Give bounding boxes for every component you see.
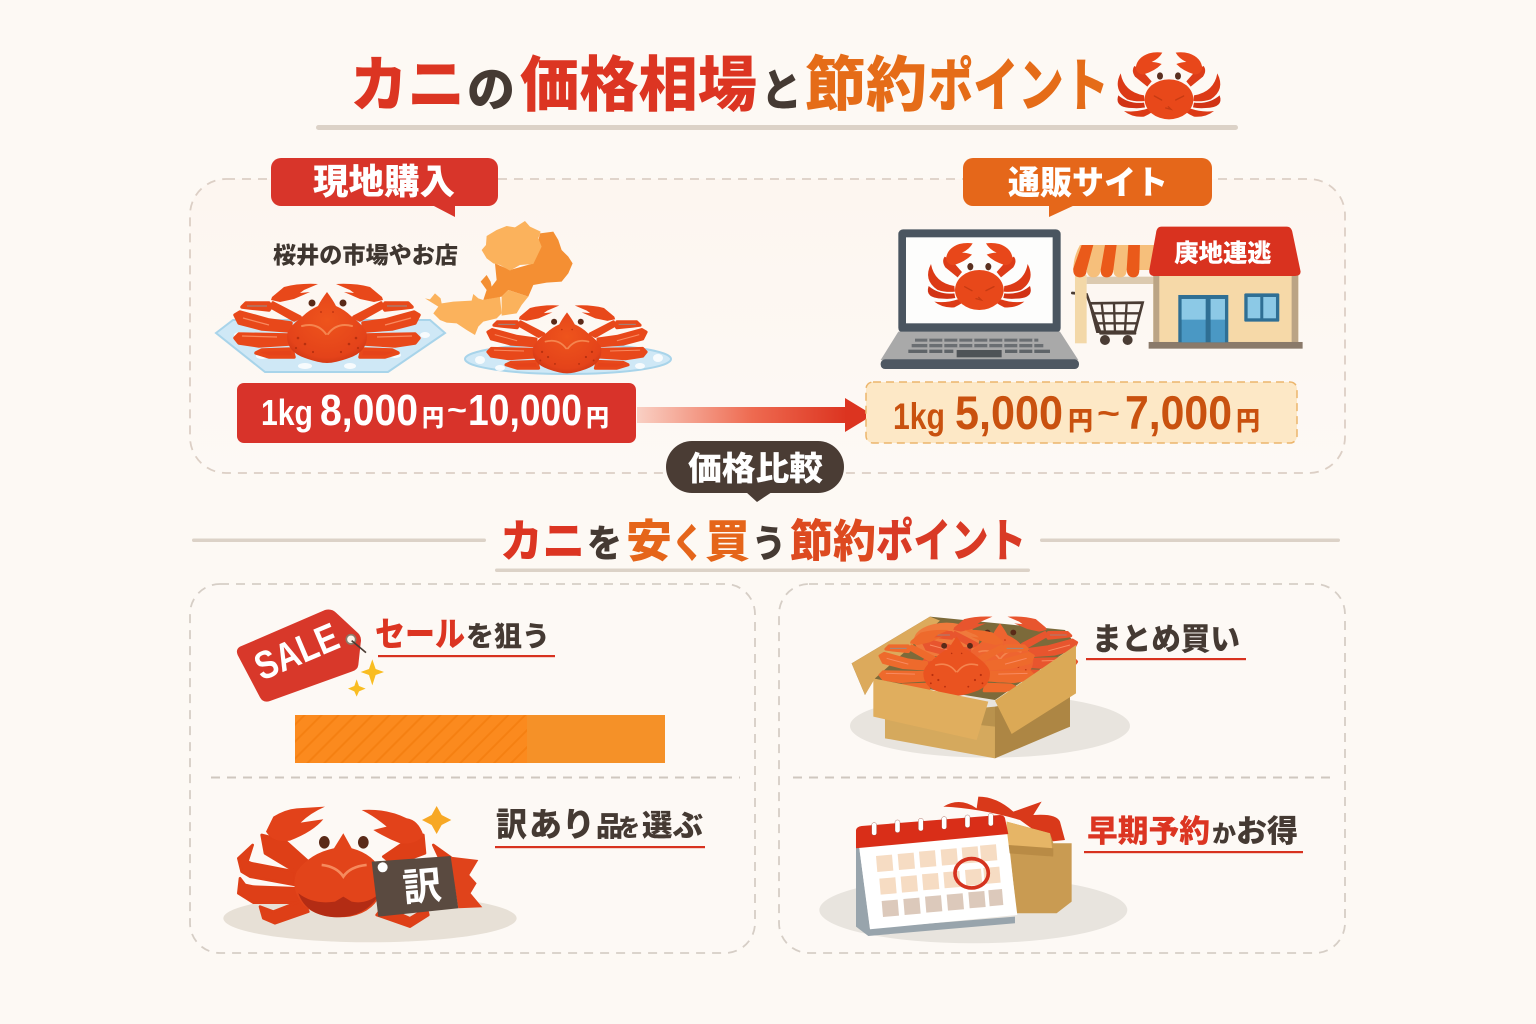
icon: shop building: 庚地連逃 bbox=[1174, 240, 1272, 268]
price box: local: 円 bbox=[586, 405, 609, 432]
title: カニ bbox=[350, 52, 465, 119]
price box: online: 1kg bbox=[893, 396, 945, 437]
illustration: crab on round ice plate bbox=[465, 305, 671, 374]
callout: price comparison: 価格比較 bbox=[688, 450, 823, 487]
icon: laptop with crab bbox=[881, 229, 1079, 369]
section divider right bbox=[1040, 538, 1340, 542]
text: sale heading: を狙う bbox=[466, 621, 550, 652]
price box: online bbox=[866, 382, 1297, 443]
bar: orange progress bbox=[295, 715, 665, 763]
text: bulk heading: まとめ買い bbox=[1092, 622, 1240, 657]
text: discount heading: を bbox=[618, 815, 640, 842]
icon: prefecture map bbox=[425, 221, 573, 335]
panel: price comparison bbox=[190, 179, 1345, 473]
title: ポイント bbox=[928, 54, 1109, 119]
price box: local bbox=[237, 383, 636, 443]
price box: online: ~ bbox=[1097, 395, 1120, 431]
text: discount heading: 品 bbox=[596, 811, 623, 842]
arrow: price comparison bbox=[637, 398, 873, 432]
heading tag: online shop bbox=[963, 158, 1212, 217]
icon: box of crabs bbox=[850, 616, 1130, 758]
icon: shopping cart bbox=[1072, 293, 1143, 345]
heading underline bbox=[495, 568, 1030, 572]
price box: local: 1kg bbox=[261, 392, 313, 433]
text: early booking heading bbox=[1084, 814, 1303, 853]
heading: saving points bbox=[500, 515, 1026, 567]
section divider left bbox=[192, 538, 486, 542]
heading: saving points: ポイント bbox=[876, 515, 1026, 567]
title bbox=[350, 52, 1109, 119]
icon: title crab bbox=[1118, 52, 1220, 119]
price box: online: 5,000 bbox=[955, 386, 1063, 439]
price box: local: 円 bbox=[422, 405, 444, 432]
text: discount heading: 訳 bbox=[496, 806, 527, 843]
price box: local: ~ bbox=[447, 394, 467, 427]
icon: sale tag: SALE bbox=[248, 615, 346, 689]
heading: saving points: カニ bbox=[500, 516, 585, 567]
text: discount heading: 選ぶ bbox=[642, 810, 703, 843]
title: 節約 bbox=[805, 52, 927, 119]
callout: price comparison bbox=[666, 441, 844, 502]
text: sale heading: セール bbox=[375, 616, 465, 654]
heading: saving points: を bbox=[587, 524, 622, 566]
price box: local: 10,000 bbox=[468, 386, 582, 435]
text: discount heading bbox=[495, 806, 705, 848]
heading: saving points: 買 bbox=[705, 516, 750, 567]
icon: discount crab: 訳 bbox=[401, 864, 443, 911]
title: の bbox=[467, 64, 515, 117]
icon: sale tag bbox=[237, 610, 384, 702]
price box: online: 円 bbox=[1068, 406, 1093, 436]
heading: saving points: 節約 bbox=[790, 516, 876, 567]
text: early booking heading: か bbox=[1212, 821, 1236, 848]
heading tag: local purchase: 現地購入 bbox=[313, 163, 455, 202]
text: early booking heading: 早期予約 bbox=[1087, 814, 1210, 849]
icon: shop building bbox=[1073, 227, 1303, 349]
title: と bbox=[761, 65, 802, 116]
panel: right tips bbox=[779, 584, 1345, 953]
title underline bbox=[316, 125, 1238, 130]
price box: online: 7,000 bbox=[1125, 386, 1232, 439]
heading: saving points: 安 bbox=[626, 516, 672, 567]
text: early booking heading: お得 bbox=[1236, 814, 1298, 849]
panel: left tips bbox=[190, 584, 755, 953]
illustration: crab on ice octagon plate bbox=[216, 284, 445, 372]
price box: online: 円 bbox=[1236, 406, 1260, 436]
heading tag: local purchase bbox=[271, 158, 498, 217]
heading: saving points: う bbox=[752, 524, 786, 566]
heading tag: online shop: 通販サイト bbox=[1008, 164, 1168, 201]
icon: discount crab bbox=[223, 806, 517, 942]
heading: saving points: く bbox=[672, 522, 704, 566]
text: market label: 桜井の市場やお店 bbox=[273, 242, 458, 268]
icon: calendar and box bbox=[819, 797, 1127, 943]
title: 価格相場 bbox=[520, 52, 757, 119]
text: discount heading: あり bbox=[529, 806, 595, 843]
price box: local: 8,000 bbox=[320, 386, 418, 435]
text: sale heading bbox=[375, 616, 555, 657]
